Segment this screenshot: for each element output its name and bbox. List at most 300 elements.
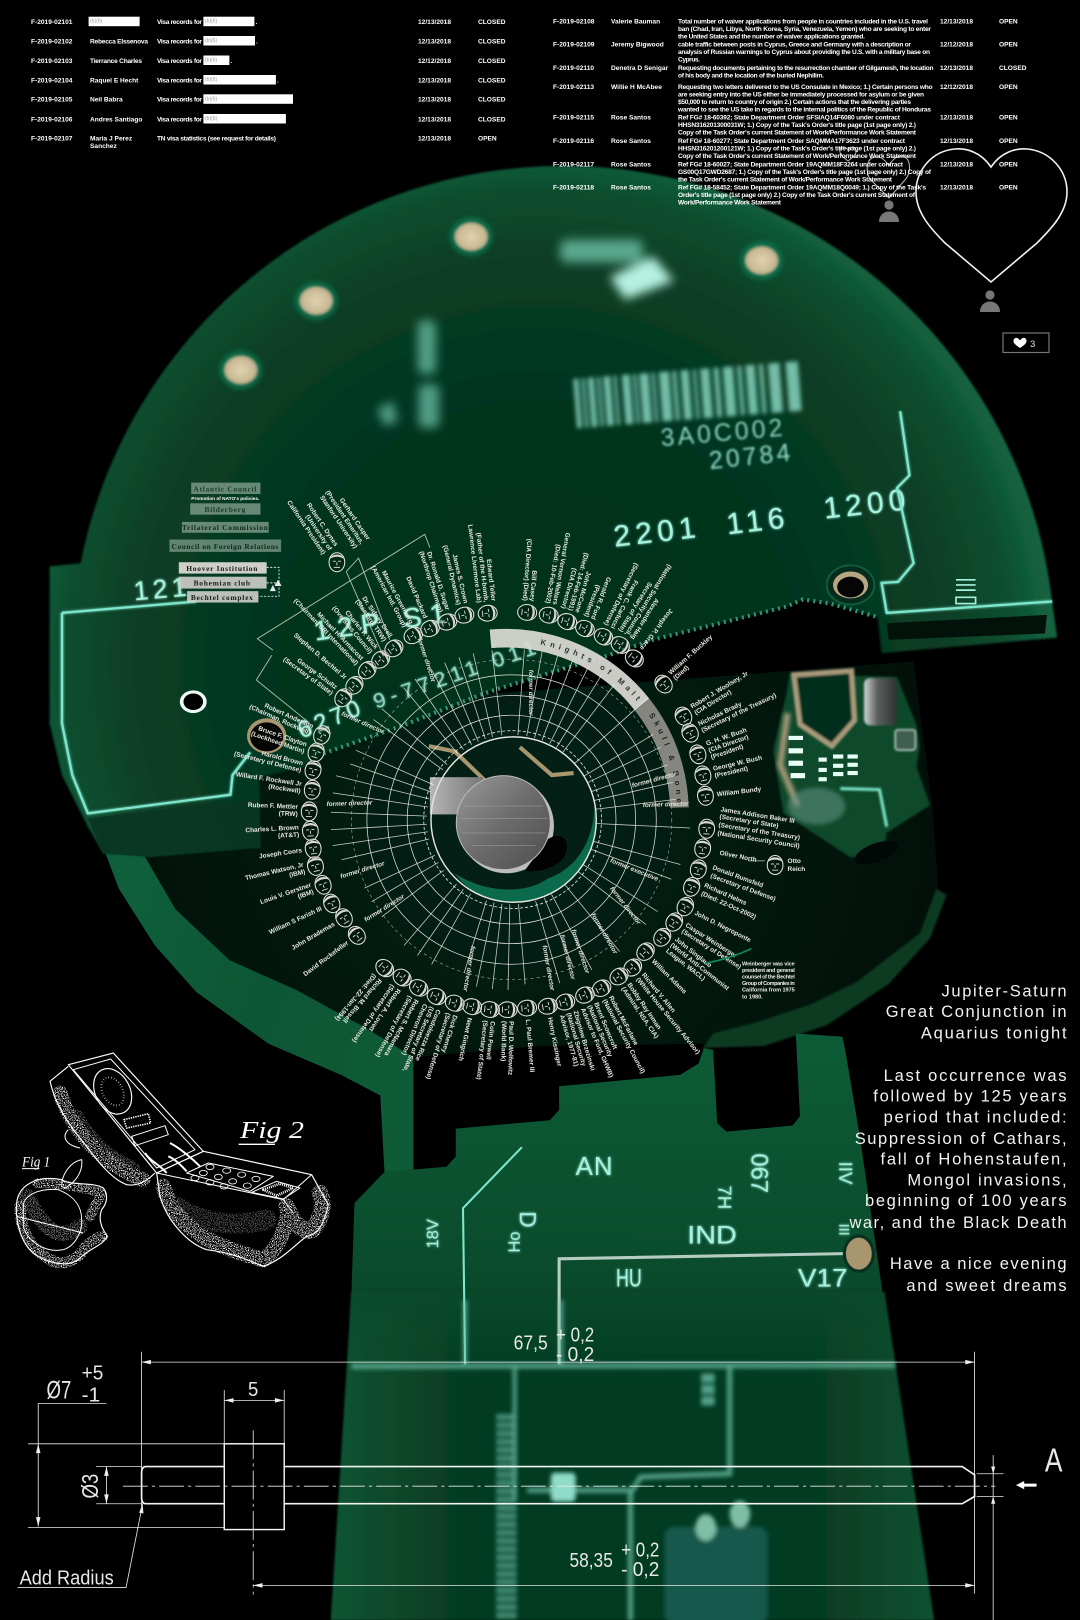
- portraits: left side: (Secretary of Defense): [233, 751, 302, 774]
- brass mounting hole right: [827, 565, 874, 605]
- like counter: [1003, 333, 1049, 352]
- dimension 67,5: - 0,2: [556, 1343, 594, 1366]
- table: right FOIA list: 12/12/2018: [940, 42, 973, 49]
- apple: [16, 1160, 107, 1264]
- central hub: [408, 737, 596, 902]
- portraits: left side: (Secretary of State): [282, 656, 334, 697]
- portraits: right side: (National Security: [586, 1004, 614, 1058]
- redaction marks: (b)(6): [205, 18, 218, 24]
- neck of the board: [331, 1292, 934, 1620]
- nut brush marks: [460, 806, 548, 845]
- portraits: bottom: (Secretary of Defense): [351, 983, 396, 1044]
- portraits: bottom: Colin Powell: [484, 1021, 496, 1060]
- Weinberger note: counsel of the Bechtel: [742, 975, 795, 981]
- dimension 58,35: - 0,2: [621, 1558, 659, 1581]
- portraits: left side: Charles L. Brown: [245, 824, 299, 834]
- lower left ring of the board: [103, 842, 413, 1172]
- Fig 1 underline: [22, 1167, 39, 1170]
- table: right FOIA list: Requesting two letters delivered to the US Consulate in Mexico; 1.) Certain persons who: [678, 84, 932, 91]
- table: left FOIA list: Visa records for: [157, 77, 202, 84]
- dimension diameter 7: -1: [82, 1383, 100, 1406]
- portraits: right side: (Died): [672, 664, 691, 682]
- Fig 2 label: Fig 2: [239, 1118, 304, 1144]
- portraits: left side: Stephen D. Bechtel Jr: [292, 632, 348, 681]
- portraits: top: Dr. Ronald D. Sugar: [425, 551, 451, 612]
- table: right FOIA list: the Task Order's current Statement of Work/Performance Work Statement: [678, 176, 893, 183]
- portraits: right side: Brent Scowcroft: [592, 1002, 618, 1051]
- portraits: top: Dr. Sidney Drell: [360, 595, 393, 639]
- dimension diameter 7: +5: [82, 1362, 103, 1385]
- table: left FOIA list: Sanchez: [90, 143, 117, 150]
- table: left FOIA list: Visa records for: [157, 116, 202, 123]
- portraits: right side: William Adams: [650, 958, 688, 996]
- dimension 67,5: [514, 1323, 594, 1366]
- table: right FOIA list: Total number of waiver applications from people in countries included in the U.S. travel: [678, 18, 928, 25]
- portraits: right side: (National Security: [565, 1012, 587, 1067]
- table: right FOIA list: F-2019-02116: [553, 138, 594, 145]
- Weinberger note: [742, 961, 795, 1000]
- dimension 58,35: + 0,2: [621, 1538, 659, 1561]
- portraits: right side: Zbigniew Brzezinski: [572, 1010, 596, 1072]
- table: right FOIA list: are seeking entry into the US either be immediately processed for asylum or be given: [678, 92, 924, 98]
- pin head: [224, 1444, 284, 1530]
- table: left FOIA list: Maria J Perez: [90, 136, 133, 143]
- portraits: bottom: Newt Gingrich: [457, 1017, 473, 1062]
- Weinberger note: Weinberger was vice: [742, 961, 795, 967]
- table: left FOIA list: F-2019-02101: [31, 19, 73, 26]
- portraits: right side: (President): [714, 765, 749, 780]
- portraits: right side: Richard V. Allen: [640, 972, 676, 1014]
- table: right FOIA list: Rose Santos: [611, 115, 651, 122]
- lower panel traces and markings: [423, 1147, 873, 1364]
- portraits: top: (National Security Council,: [623, 563, 672, 637]
- Weinberger note: California from 1975: [742, 988, 795, 994]
- table: left FOIA list: 12/12/2018: [418, 58, 451, 65]
- table: right FOIA list: ban (Chad, Iran, Libya, North Korea, Syria, Venezuela, Yemen) who are seeking to enter: [678, 26, 931, 33]
- portraits: left side: (Chairman, SRI International): [292, 598, 359, 667]
- portraits: right side: Robert J. Woolsey, Jr: [690, 670, 750, 710]
- IIV marking: IIV: [835, 1162, 856, 1185]
- portraits: left side: Thomas Watson, Jr: [245, 862, 305, 882]
- table: right FOIA list: [553, 18, 1027, 207]
- portraits: right side: William Bundy: [716, 786, 762, 798]
- brass mounting hole left: [247, 718, 286, 753]
- portraits: right side: (CIA Director): [708, 734, 750, 754]
- organisations list: Atlantic Council: [193, 484, 257, 493]
- small SMD part: [895, 730, 916, 750]
- fragment black slot: [852, 836, 901, 869]
- Hoover group portrait with university heads: Stanford University): [318, 494, 359, 550]
- table: right FOIA list: Valerie Bauman: [611, 18, 660, 25]
- board code 12P S1: 12P S1: [312, 596, 455, 647]
- table: right FOIA list: CLOSED: [999, 65, 1027, 72]
- Knights of Malta band: [490, 638, 642, 704]
- table: right FOIA list: 12/13/2018: [940, 65, 973, 72]
- portraits: left side: (Chairman, Rockwell): [248, 704, 311, 737]
- silk mark near right edge: [956, 580, 976, 604]
- Knights of Malta label: Knights of Malta: [540, 639, 640, 701]
- table: left FOIA list: CLOSED: [478, 38, 506, 45]
- portraits: top: Secretary of State): [617, 581, 653, 633]
- portraits: left side: (Lockheed Martin): [250, 730, 305, 755]
- portraits: right side: John Singlaub: [673, 936, 713, 969]
- portraits: top: (CIA Director): [559, 567, 578, 609]
- nut under-rim: [459, 778, 554, 873]
- sidebar text: Have a nice evening: [890, 1254, 1067, 1273]
- Fig 1 label: Fig 1: [21, 1154, 50, 1170]
- table: right FOIA list: OPEN: [999, 84, 1018, 91]
- stippled shading: [20, 1093, 322, 1263]
- sidebar text: fall of Hohenstaufen,: [881, 1150, 1067, 1169]
- portraits: right side: Advisor, 1977-81): [558, 1014, 579, 1067]
- portraits: top: (Secretary of Defense): [602, 562, 639, 627]
- redaction marks: (b)(6): [205, 58, 218, 64]
- portraits: right side: (President): [710, 743, 744, 761]
- blurred silk marks: [377, 320, 439, 428]
- table: right FOIA list: OPEN: [999, 42, 1018, 49]
- Hoover Institution: [179, 562, 267, 574]
- lower right ring of the board: [703, 889, 947, 1048]
- portraits: top: (Father of the H-bomb,: [474, 532, 489, 603]
- Skull and Bones band: [642, 704, 679, 807]
- dimension 67,5: + 0,2: [556, 1323, 594, 1346]
- phone upper half: [50, 1053, 203, 1185]
- portraits: top: Frank C. Carlucci: [609, 579, 639, 630]
- portraits: left side: (IBM): [289, 869, 306, 879]
- table: left FOIA list: CLOSED: [478, 58, 506, 65]
- III marking: III: [835, 1224, 851, 1236]
- right board fragment: [773, 674, 930, 860]
- portraits: right side: (Died: 22-Oct-2002): [700, 890, 757, 921]
- portraits: right side: (Secretary of the Treasury): [700, 692, 778, 734]
- table: right FOIA list: HHSN316201300031W; 1.) Copy of the Task's Order's title page (1st page only) 2.): [678, 122, 916, 129]
- portraits: bottom: Condoleezza Rice: [413, 1008, 441, 1062]
- dashed links: [258, 567, 279, 596]
- Council on Foreign Relations: [169, 539, 281, 552]
- table: left FOIA list: TN visa statistics (see request for details): [157, 136, 276, 143]
- portraits: top: David Packard: [404, 576, 428, 620]
- Hoover group portrait with university heads: Robert C. Dynes: [305, 502, 339, 548]
- sidebar text: Great Conjunction in: [886, 1002, 1067, 1021]
- Trilateral Commission: [182, 522, 269, 533]
- portraits: left side: (Rockwell): [268, 783, 301, 795]
- portraits: left side: (TRW): [279, 810, 298, 818]
- dark inner disc of the board: [103, 661, 938, 1057]
- former director tags: [326, 637, 689, 992]
- table: left FOIA list: F-2019-02103: [31, 58, 73, 65]
- portraits: left side: Willard F. Rockwell Jr: [235, 771, 303, 788]
- view arrow A: [977, 1443, 1062, 1620]
- table: left FOIA list: F-2019-02107: [31, 136, 73, 143]
- heart: tiny outline: [840, 147, 856, 161]
- portraits: left side: Charles F. Wick: [343, 609, 379, 651]
- table: right FOIA list: 12/13/2018: [940, 185, 973, 192]
- table: left FOIA list: 12/13/2018: [418, 97, 451, 104]
- portraits: right side: [525, 632, 805, 1079]
- redaction marks: (b)(6): [205, 77, 218, 83]
- table: left FOIA list: Visa records for: [157, 58, 202, 65]
- table: right FOIA list: HHSN316201200121W; 1.) Copy of the Task's Order's title page (1st page only) 2.): [678, 146, 916, 152]
- sidebar text: Aquarius tonight: [921, 1024, 1067, 1043]
- board code 2201 116 1200: [612, 483, 912, 554]
- Add Radius note: Add Radius: [20, 1566, 114, 1589]
- table: left FOIA list: 12/13/2018: [418, 19, 451, 26]
- portraits: top: Gerald R. Ford: [589, 576, 612, 620]
- hub metal rectangle: [430, 777, 483, 814]
- 7 marking: 7H: [714, 1185, 735, 1209]
- portraits: right side: (National Security Council): [717, 830, 800, 850]
- redaction boxes: [89, 17, 293, 124]
- redaction marks: (b)(6): [205, 38, 218, 44]
- portraits: bottom: Henry Kissinger: [546, 1017, 563, 1068]
- patent drawing: apple phone: [16, 1053, 328, 1266]
- table: right FOIA list: Rose Santos: [611, 138, 651, 145]
- teal trace: [840, 789, 887, 827]
- Atlantic Council: [191, 483, 260, 494]
- white contact pads: [789, 736, 858, 781]
- portraits: right side: George W. Bush: [712, 755, 763, 773]
- technical drawing of a pin: [18, 1323, 1062, 1620]
- portraits: top: (Died: 14-Feb-1991): [566, 552, 589, 611]
- view arrow A: A: [1045, 1443, 1062, 1480]
- portraits: right side: Nicholas Brady: [697, 701, 743, 728]
- portraits: top: Lawrence Livermore Lab): [466, 524, 482, 603]
- portraits: bottom: Chevron Director): [400, 1003, 428, 1056]
- table: right FOIA list: Rose Santos: [611, 185, 651, 192]
- portraits: left side: (Overseas Council): [330, 605, 373, 655]
- portraits: top: Bill Casey: [528, 570, 537, 602]
- table: right FOIA list: 12/13/2018: [940, 161, 973, 168]
- Weinberger note: Group of Companies in: [742, 981, 795, 987]
- lower gray blob: [788, 788, 845, 825]
- table: right FOIA list: wanted to see the US take in regards to the internal politics of the Republic of Honduras: [677, 106, 931, 114]
- serrated edge of the upper disc: [323, 599, 877, 753]
- portraits: top: (Stanford, TRW): [354, 598, 387, 643]
- former director tags: former director: [340, 860, 386, 880]
- redaction marks: [90, 18, 218, 122]
- portraits: right side: (National Security Council): [601, 998, 646, 1075]
- portraits: right side: League, WACL): [664, 948, 706, 983]
- Hoover group portrait with university heads: Gerhard Casper: [338, 497, 371, 542]
- portraits: right side: (Secretary of Defense): [680, 928, 742, 971]
- organisations list: Trilateral Commission: [182, 523, 269, 532]
- table: left FOIA list: CLOSED: [478, 77, 506, 84]
- portraits: bottom: L. Paul Bremer III: [524, 1019, 535, 1073]
- portraits: left side: [233, 591, 465, 982]
- sidebar text: and sweet dreams: [906, 1276, 1067, 1295]
- portraits: left side: Joseph Coors: [259, 847, 303, 860]
- portraits: top: (President): [582, 584, 601, 618]
- Hoover group portrait with university heads: (University of: [304, 514, 333, 553]
- icon: person large heart: [980, 290, 1000, 312]
- table: left FOIA list: Raquel E Hecht: [90, 77, 139, 84]
- sidebar text: Jupiter-Saturn: [942, 981, 1067, 1000]
- organisations list: Bechtel complex: [191, 593, 254, 602]
- portraits: right side: Robert McFarlane: [607, 995, 639, 1047]
- AN marking: AN: [576, 1153, 614, 1181]
- table: right FOIA list: OPEN: [999, 115, 1018, 122]
- pin body: [142, 1444, 975, 1530]
- table: right FOIA list: $50,000 to return to country of origin 2.) Certain actions that the delivering parties: [678, 99, 911, 106]
- sidebar text: period that included:: [884, 1107, 1067, 1126]
- table: right FOIA list: of his body and the location of the buried Nephilim.: [678, 72, 824, 80]
- 067 marking: 067: [745, 1153, 772, 1193]
- HU marking: HU: [616, 1266, 642, 1293]
- table: right FOIA list: Rose Santos: [611, 161, 651, 168]
- table: right FOIA list: 12/13/2018: [940, 115, 973, 122]
- table: right FOIA list: Copy of the Task Order's current Statement of Work/Performance Work Statement: [678, 153, 917, 160]
- table: right FOIA list: Willie H McAbee: [611, 84, 662, 91]
- portraits: right side: (Secretary of the Treasury): [718, 822, 800, 842]
- table: left FOIA list: F-2019-02104: [31, 77, 73, 84]
- right edge slot: [887, 615, 1047, 640]
- portraits: bottom: (Secretary of Defense): [374, 994, 413, 1058]
- portraits: right side: Donald Rumsfeld: [711, 864, 764, 889]
- Bechtel complex: [187, 591, 258, 603]
- portraits: bottom: (Secretary of State): [475, 1020, 488, 1080]
- table: left FOIA list: F-2019-02106: [31, 116, 73, 123]
- organisations list: Hoover Institution: [186, 564, 258, 573]
- sidebar text: war, and the Black Death: [849, 1213, 1067, 1232]
- sidebar text: Last occurrence was: [884, 1066, 1067, 1085]
- former director tags: former executive: [609, 857, 659, 883]
- table: right FOIA list: OPEN: [999, 138, 1018, 145]
- hub green disk: [431, 737, 596, 902]
- table: right FOIA list: 12/13/2018: [940, 138, 973, 145]
- board traces, upper: [62, 411, 1052, 813]
- former director tags: former director: [643, 801, 689, 809]
- portraits: top: (General Dynamics): [441, 545, 462, 606]
- rotated marking: Ho: [505, 1231, 524, 1253]
- Skull and Bones label: Skull & Bones: [650, 713, 681, 802]
- organisations list: Council on Foreign Relations: [172, 542, 279, 551]
- portraits: right side: Advisor to Ford, GHWB): [579, 1007, 614, 1079]
- portraits: bottom: [331, 878, 569, 1083]
- former director tags: former director: [527, 670, 534, 716]
- Bohemian club: [179, 577, 267, 589]
- table: right FOIA list: 12/13/2018: [940, 18, 973, 25]
- dimension 5: 5: [248, 1378, 258, 1401]
- former director tags: former director: [541, 945, 556, 992]
- heart: small outline: [867, 156, 910, 198]
- organisations list: Bilderberg: [205, 505, 246, 514]
- Bilderberg: [190, 503, 260, 515]
- table: right FOIA list: Ref FG# 18-58452; State Department Order 19AQMM18Q0049; 1.) Copy of the Task's: [678, 185, 926, 192]
- portraits: left side: Louis V. Gerstner: [259, 882, 313, 906]
- portraits: right side: James Addison Baker III: [720, 806, 795, 825]
- table: right FOIA list: F-2019-02113: [553, 84, 594, 91]
- concentric rings: [351, 659, 672, 980]
- former director tags: former director: [326, 800, 373, 808]
- portraits: left side: Robert Anderson: [263, 702, 314, 730]
- blurred lower traces: [351, 1300, 895, 1620]
- portraits: bottom: Richard M. Bissell: [341, 977, 383, 1024]
- metal capacitor: [864, 678, 897, 726]
- right fragment details: [780, 671, 916, 869]
- IND marking: IND: [687, 1222, 737, 1249]
- hub black shadow: [525, 836, 567, 871]
- table: right FOIA list: cable traffic between posts in Cyprus, Greece and Germany with a description or: [678, 42, 911, 49]
- table: right FOIA list: GS00Q17GWD2687; 1.) Copy of the Task's Order's title page (1st page only) 2.) Copy of: [678, 169, 932, 176]
- table: left FOIA list: .: [256, 38, 258, 45]
- portraits: top: (CIA Director) (Died): [521, 538, 533, 601]
- portraits: top: Edward Teller: [485, 559, 497, 602]
- table: right FOIA list: F-2019-02110: [553, 65, 594, 72]
- former director tags: former director: [631, 771, 678, 789]
- board code 2201 116 1200: 1200: [822, 483, 912, 526]
- board code 2201 116 1200: 116: [725, 501, 791, 541]
- barcode second serial text: 20784: [708, 439, 795, 475]
- table: left FOIA list: 12/13/2018: [418, 136, 451, 143]
- dimension 5: [224, 1378, 284, 1444]
- lower panel of the board: [348, 1033, 896, 1385]
- table: right FOIA list: Ref FG# 18-60392; State Department Order SFSIAQ14F6080 under contract: [678, 115, 901, 122]
- icon: person small heart: [879, 200, 899, 222]
- portraits: top: Alexander Haig: [629, 597, 660, 641]
- former director tags: former director: [570, 929, 591, 975]
- portraits: bottom: (World Bank): [499, 1021, 507, 1061]
- table: right FOIA list: F-2019-02109: [553, 42, 595, 49]
- table: right FOIA list: Copy of the Task Order's current Statement of Work/Performance Work Statement: [678, 130, 917, 137]
- table: left FOIA list: [31, 17, 506, 150]
- portraits: left side: David Rockefeller: [302, 940, 351, 978]
- sidebar text: followed by 125 years: [873, 1087, 1067, 1106]
- Add Radius note: [18, 1504, 143, 1589]
- table: left FOIA list: .: [230, 58, 232, 65]
- dimension diameter 7: [28, 1362, 224, 1527]
- barcode serial text: 3A0C002: [660, 415, 787, 452]
- table: left FOIA list: CLOSED: [478, 97, 506, 104]
- gray panel trace: [559, 1254, 844, 1364]
- D marking: D: [515, 1211, 541, 1228]
- board code 121: 121: [132, 572, 192, 606]
- table: right FOIA list: F-2019-02115: [553, 115, 594, 122]
- radial network diagram: [170, 482, 805, 1080]
- portraits: right side: (Secretary of State): [719, 814, 779, 830]
- table labels seen through the heart: OPEN: [999, 185, 1018, 192]
- weinberger green arc: [706, 949, 751, 963]
- board code 9-77211 011: 9-77211 011: [370, 633, 544, 714]
- NATO note: Promotion of NATO's policies.: [191, 496, 259, 502]
- table: right FOIA list: Ref FG# 18-60027; State Department Order 19AQMM18F3264 under contract: [678, 161, 904, 168]
- table: left FOIA list: Andres Santiago: [90, 116, 142, 123]
- upper board disc: [50, 166, 1057, 857]
- table: left FOIA list: .: [277, 77, 279, 84]
- table: left FOIA list: F-2019-02102: [31, 38, 73, 45]
- dimension diameter 3: [77, 1467, 142, 1504]
- sidebar text: [849, 981, 1067, 1295]
- 18V marking: 18V: [423, 1219, 442, 1248]
- former director tags: former director: [363, 893, 406, 924]
- sidebar text: Suppression of Cathars,: [855, 1129, 1067, 1148]
- portraits: right side: Caspar Weinberger: [684, 922, 738, 960]
- table: right FOIA list: F-2019-02108: [553, 18, 595, 25]
- icon: counter heart: [1013, 338, 1027, 348]
- portraits: right side: (Admiral, NSA, CIA): [620, 986, 660, 1040]
- portraits: left side: Harold Brown: [261, 750, 304, 767]
- portraits: right side: Bobby Ray Inman: [625, 982, 662, 1031]
- table: right FOIA list: F-2019-02117: [553, 161, 594, 168]
- overall length dimension: [142, 1352, 975, 1594]
- V17 marking: V17: [798, 1266, 847, 1293]
- centre lines: [123, 1430, 995, 1595]
- portraits: bottom: Robert S. McNamara: [382, 998, 419, 1057]
- former director tags: former director: [558, 934, 576, 981]
- organisations list: [169, 483, 282, 603]
- table: right FOIA list: OPEN: [999, 18, 1018, 25]
- former director tags: former director: [340, 711, 385, 736]
- Hoover group portrait with university heads: [285, 489, 371, 572]
